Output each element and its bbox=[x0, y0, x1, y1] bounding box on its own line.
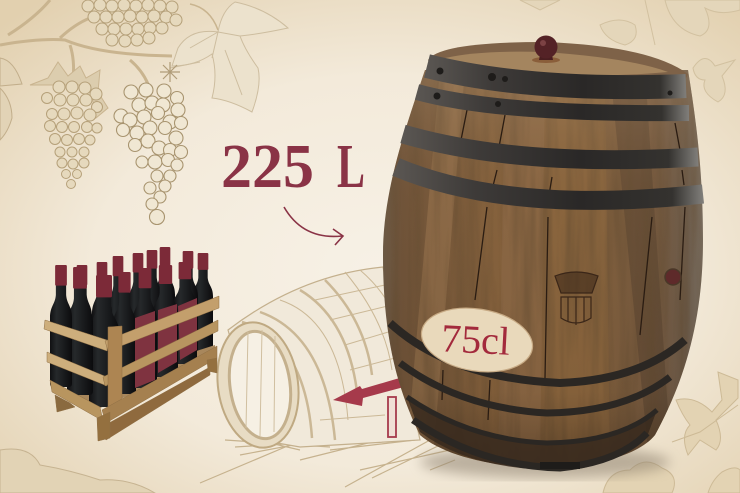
vine tendril star bbox=[160, 62, 180, 82]
vine stems bbox=[0, 0, 218, 84]
front row bottles bbox=[50, 262, 197, 407]
back crate rails bbox=[60, 345, 215, 408]
headline: 225 L: L bbox=[337, 133, 365, 201]
right grape cluster bbox=[114, 83, 188, 224]
faint leaves bottom left bbox=[0, 449, 155, 493]
left grape cluster bbox=[30, 62, 108, 188]
barrel ground shadow bbox=[420, 446, 670, 478]
hoop rivets bbox=[434, 68, 672, 469]
lower iron hoops bbox=[390, 323, 685, 468]
crate of wine bottles bbox=[44, 247, 219, 441]
barrel hoops and staves bbox=[242, 270, 402, 440]
barrel staves bbox=[388, 70, 703, 463]
hatched ground shadow bbox=[200, 425, 455, 487]
red bottle labels bbox=[135, 298, 197, 388]
branded crest bbox=[555, 272, 598, 325]
large oak barrel bbox=[383, 36, 703, 480]
lid knob bbox=[532, 36, 560, 63]
red measuring arrow bbox=[333, 377, 404, 406]
headline: 225 L: 225 bbox=[221, 133, 314, 201]
barrel body bbox=[383, 70, 703, 467]
headline: 225 L bbox=[221, 133, 365, 201]
vine leaf bbox=[170, 2, 288, 112]
faint leaves top right bbox=[520, 0, 740, 102]
back row bottles bbox=[72, 247, 213, 385]
lower dark base band bbox=[407, 397, 657, 470]
left edge leaf bbox=[0, 58, 22, 140]
faint leaves bottom right bbox=[603, 372, 740, 493]
bung knob bbox=[665, 269, 681, 285]
oval 75cl label bbox=[417, 301, 537, 379]
barrel body bbox=[228, 267, 420, 447]
engraved barrel on its side bbox=[200, 267, 455, 487]
top grape cluster bbox=[82, 0, 182, 47]
crate wooden frame bbox=[44, 296, 219, 441]
red height marker bbox=[388, 397, 396, 437]
oval 75cl label: 75cl bbox=[440, 315, 511, 364]
iron hoops bbox=[396, 66, 703, 200]
curved arrow to barrel bbox=[284, 207, 343, 245]
barrel head bbox=[210, 317, 306, 453]
vine branch illustration bbox=[0, 0, 288, 224]
barrel top rim and lid bbox=[428, 42, 688, 97]
